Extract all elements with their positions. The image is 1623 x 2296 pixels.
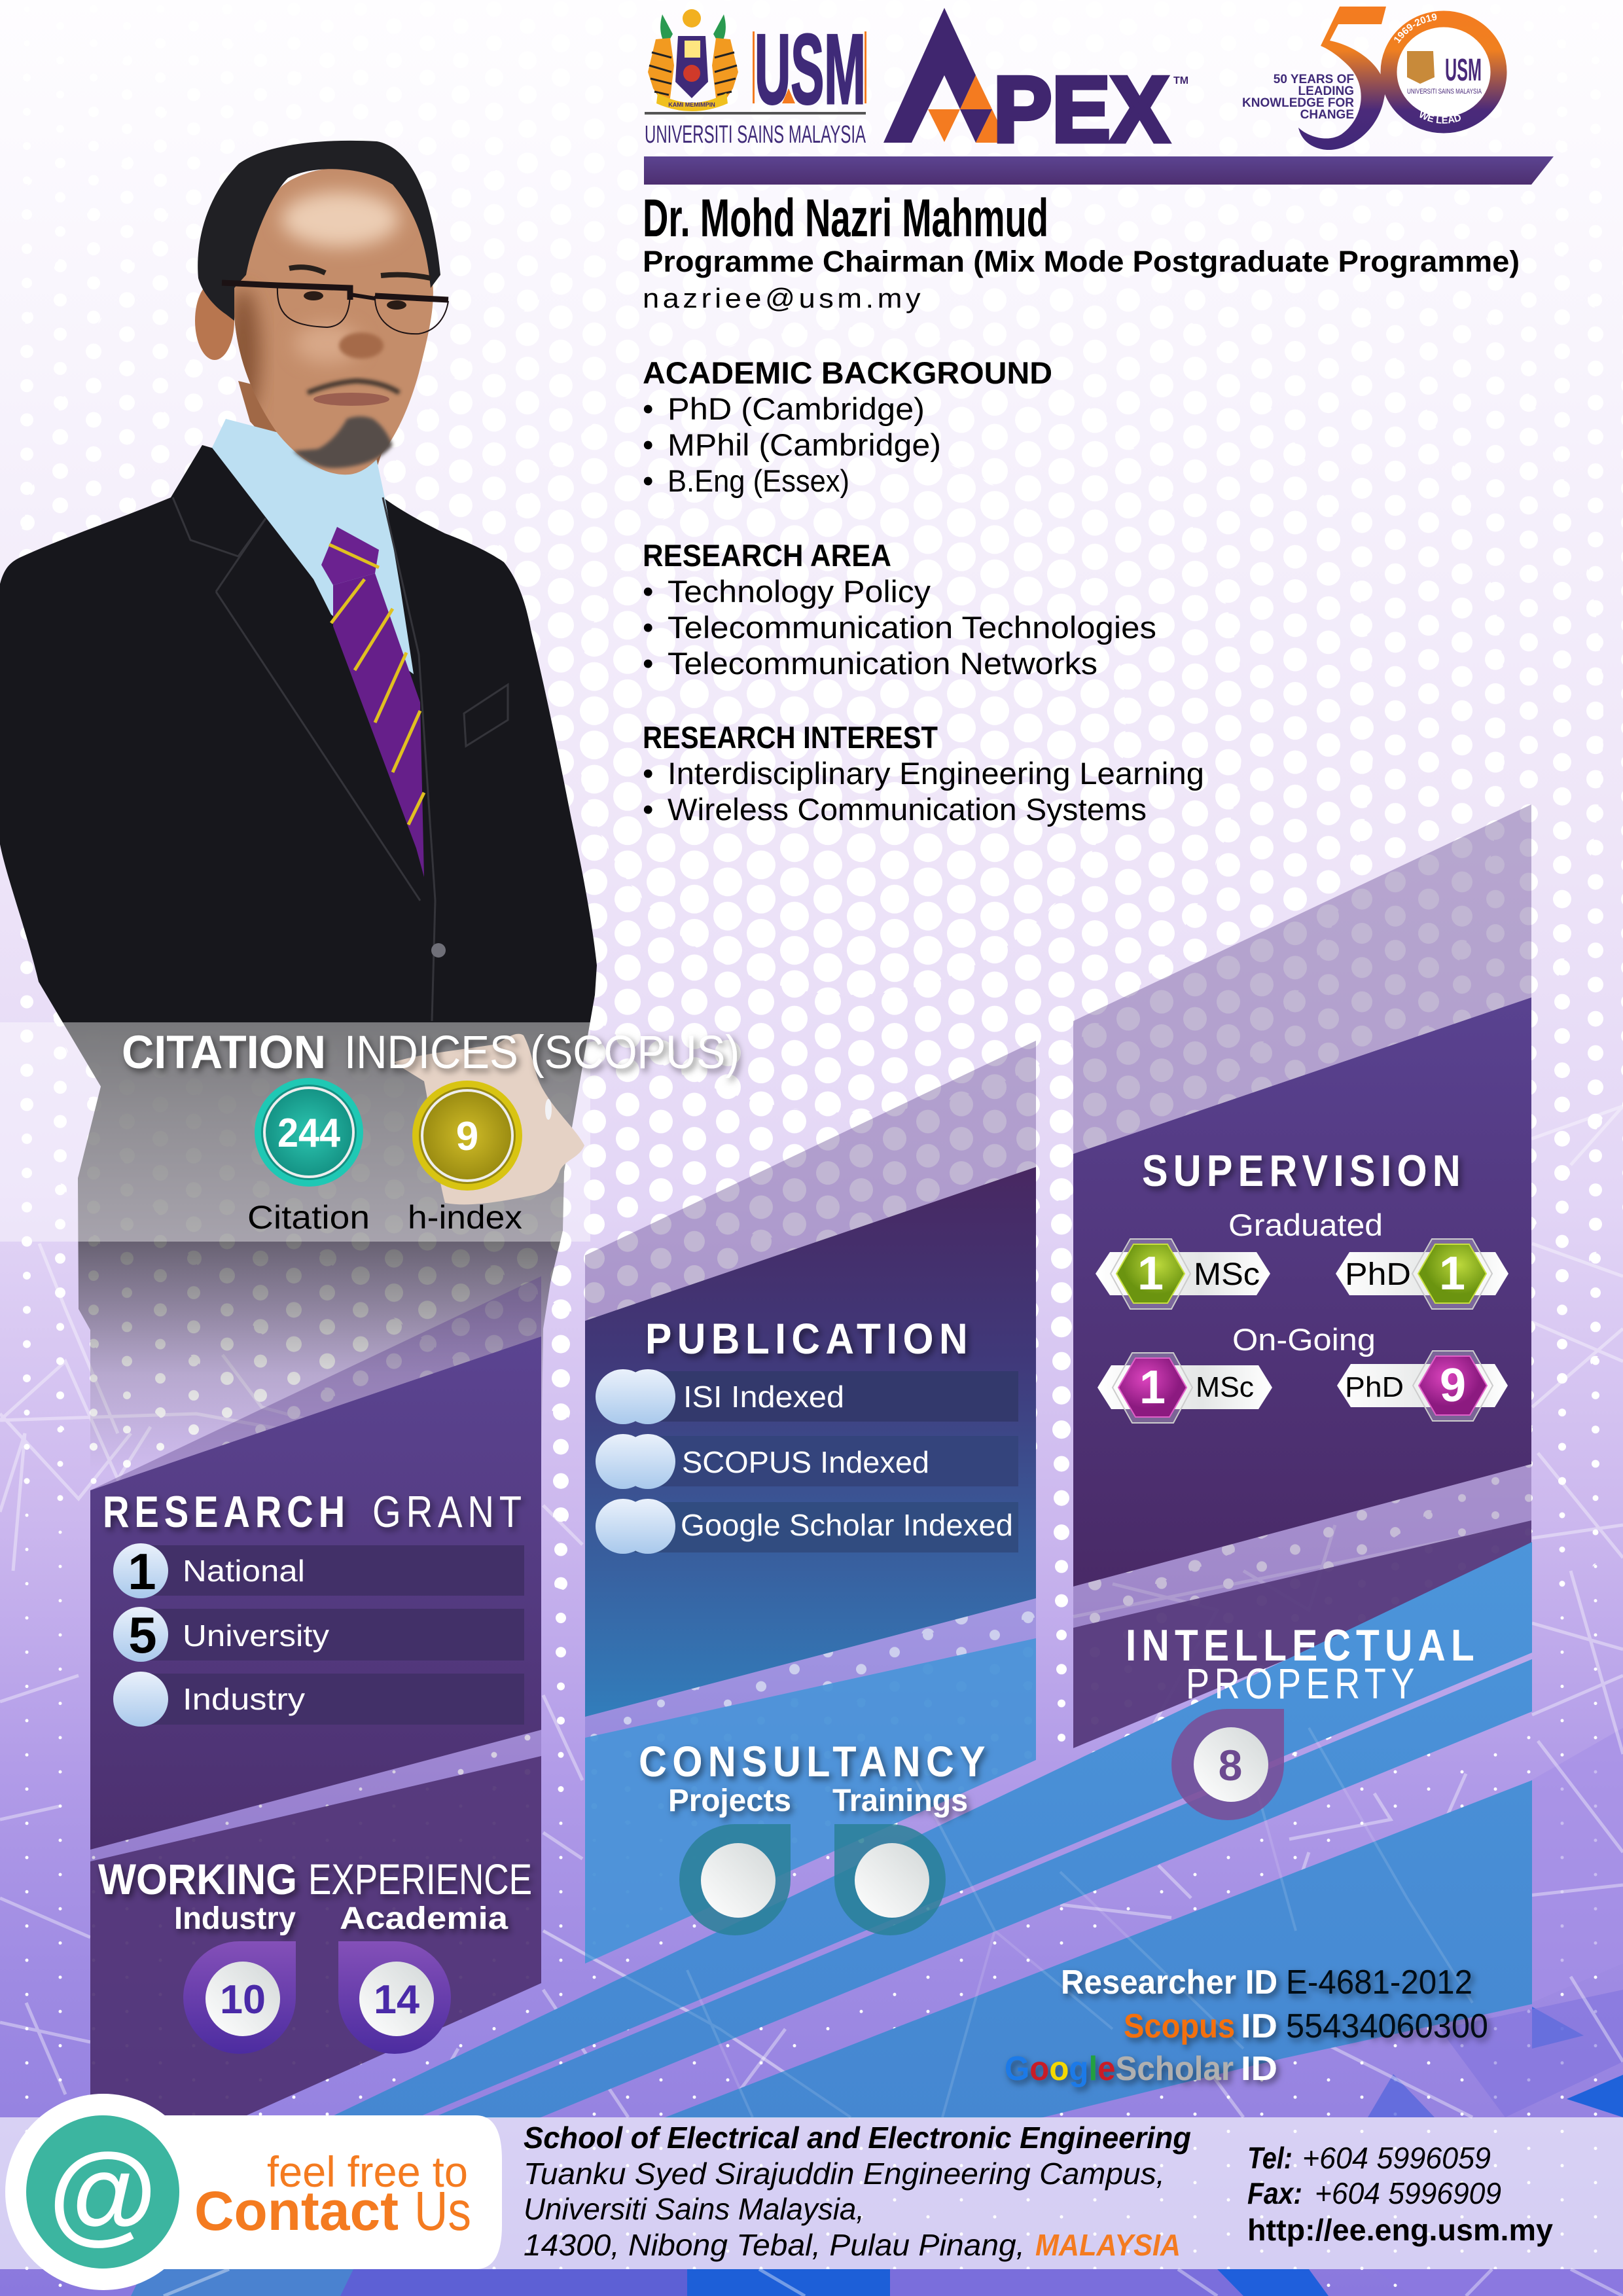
row: Google Scholar xyxy=(596,1499,1018,1554)
publication content xyxy=(596,1314,1018,1554)
row: national: 1 xyxy=(128,1543,156,1600)
row: ISI xyxy=(596,1369,1018,1424)
badge: h-index xyxy=(416,1084,519,1187)
text block: research area: • xyxy=(643,610,653,645)
working experience content xyxy=(98,1855,532,2054)
jacket and body xyxy=(0,445,597,1490)
header logo: 50 years: 1969-2019 xyxy=(1394,13,1437,43)
panel body xyxy=(585,1167,1036,1717)
header logo: 50 years: UNIVERSITI SAINS MALAYSIA xyxy=(1407,88,1482,96)
header logo: 50 years: KNOWLEDGE FOR xyxy=(1242,96,1354,110)
name: Dr. Mohd Nazri Mahmud xyxy=(643,188,1048,248)
email: nazriee@usm.my xyxy=(643,283,924,314)
text block: academic background: MPhil (Cambridge) xyxy=(668,427,941,462)
header logo: USM crest: KAMI MEMIMPIN xyxy=(668,101,715,108)
translucent slope xyxy=(1073,804,1531,1154)
chip: graduated MSc: 1 xyxy=(1137,1247,1164,1300)
text block: research interest: • xyxy=(643,792,653,827)
text block: academic background: • xyxy=(643,391,653,426)
researcher id: Researcher ID xyxy=(1061,1964,1277,2001)
scopus id: ID xyxy=(1241,2007,1277,2045)
telephone: Tel: xyxy=(1247,2141,1293,2175)
labels: Industry xyxy=(174,1901,296,1936)
text block: research interest: Interdisciplinary Engineering Learning xyxy=(668,756,1204,791)
text block: research area: RESEARCH AREA xyxy=(643,538,891,573)
chip: on-going MSc: 1 xyxy=(1139,1361,1166,1414)
translucent slope xyxy=(90,1276,541,1490)
lower panel xyxy=(90,1756,541,2118)
fax: Fax: xyxy=(1247,2176,1302,2210)
background network lines xyxy=(0,1106,1623,2296)
heading: PUBLICATION xyxy=(645,1314,973,1363)
text block: academic background: ACADEMIC BACKGROUND xyxy=(643,355,1052,390)
header logo: APEX: PEX xyxy=(993,58,1169,162)
at sign: @ xyxy=(48,2130,157,2255)
label: citation: Citation xyxy=(247,1199,370,1236)
tie xyxy=(321,527,424,877)
lower panel xyxy=(1073,1520,1531,1748)
intellectual property content xyxy=(1126,1621,1480,1820)
panel: publication and consultancy xyxy=(585,1041,1036,1964)
heading: WORKING xyxy=(98,1855,297,1903)
address block: 14300, Nibong Tebal, Pulau Pinang, xyxy=(524,2228,1025,2262)
label: on-going: On-Going xyxy=(1232,1322,1376,1357)
subheading: PROPERTY xyxy=(1186,1659,1419,1708)
badge: patents: 8 xyxy=(1219,1741,1242,1789)
badge: h-index: 9 xyxy=(456,1114,478,1159)
badge: citation count xyxy=(258,1081,360,1183)
header logo: APEX xyxy=(883,8,1188,162)
text block: academic background: • xyxy=(643,427,653,462)
researcher id xyxy=(1061,1964,1472,2001)
labels: Projects xyxy=(668,1784,791,1818)
scopus id: Scopus xyxy=(1124,2007,1235,2045)
chip: on-going PhD: 9 xyxy=(1440,1359,1466,1412)
address block: School of Electrical and Electronic Engineering xyxy=(524,2121,1191,2155)
fax: +604 5996909 xyxy=(1315,2176,1501,2210)
panel: research grant and working experience xyxy=(90,1276,541,2118)
scopus id: 55434060300 xyxy=(1286,2007,1488,2045)
row: SCOPUS xyxy=(596,1434,1018,1489)
header logo: 50 years: LEADING xyxy=(1298,84,1354,98)
hair xyxy=(198,141,440,321)
chip: graduated PhD: PhD xyxy=(1345,1257,1411,1292)
text block: research area: Technology Policy xyxy=(668,574,931,609)
chip: graduated MSc: MSc xyxy=(1194,1257,1260,1292)
chip: graduated MSc xyxy=(1096,1239,1270,1309)
row: industry xyxy=(113,1672,524,1727)
header bar xyxy=(644,156,1554,185)
chip: on-going MSc: MSc xyxy=(1196,1371,1254,1403)
badge: patents xyxy=(1171,1709,1284,1820)
label: h-index: h-index xyxy=(408,1199,522,1236)
text block: research area: • xyxy=(643,646,653,681)
panel: citation band xyxy=(0,1022,590,1242)
row: university xyxy=(113,1606,524,1664)
translucent divider xyxy=(90,1730,541,1861)
header logo: USM crest xyxy=(648,9,738,111)
contact details xyxy=(1247,2141,1553,2247)
translucent slope xyxy=(585,1041,1036,1321)
text block: research area: Telecommunication Networks xyxy=(668,646,1097,681)
row: ISI: ISI Indexed xyxy=(683,1380,844,1414)
researcher identifiers xyxy=(1005,1964,1488,2088)
text block: research interest xyxy=(643,720,1204,827)
scopus id xyxy=(1124,2007,1488,2045)
header logo: 50 years xyxy=(1242,7,1507,150)
text block: academic background: • xyxy=(643,463,653,498)
heading: INTELLECTUAL xyxy=(1126,1621,1480,1670)
chip: on-going PhD: PhD xyxy=(1345,1371,1404,1403)
white pill xyxy=(103,2115,502,2269)
citation indices section xyxy=(122,1027,740,1236)
heading: INDICES (SCOPUS) xyxy=(344,1027,740,1079)
row: Google Scholar: Google Scholar Indexed xyxy=(681,1508,1013,1542)
contact us: Contact xyxy=(194,2180,399,2242)
neck xyxy=(238,381,393,521)
header logo: USM wordmark: USM xyxy=(755,14,866,125)
contact callout xyxy=(5,2094,502,2290)
label: graduated: Graduated xyxy=(1228,1208,1383,1242)
jacket lapels and pocket xyxy=(173,497,508,1021)
text block: research area xyxy=(643,538,1156,681)
chip: on-going PhD xyxy=(1337,1351,1508,1421)
blue diagonal stripes xyxy=(329,1542,1532,2118)
header logo: 50 years: WE LEAD xyxy=(1419,111,1461,124)
heading: CONSULTANCY xyxy=(639,1737,991,1785)
face xyxy=(234,167,433,475)
text block: academic background: B.Eng (Essex) xyxy=(668,463,849,498)
footer band xyxy=(0,2117,1623,2269)
chip: graduated PhD: 1 xyxy=(1439,1247,1465,1300)
panel: supervision and intellectual property xyxy=(1073,804,1531,1748)
text block: research area: • xyxy=(643,574,653,609)
header logo: 50 years: CHANGE xyxy=(1300,108,1354,122)
text block: academic background xyxy=(643,355,1052,498)
teal circle xyxy=(26,2115,179,2269)
text block: research interest: RESEARCH INTEREST xyxy=(643,720,938,755)
address block: Universiti Sains Malaysia, xyxy=(524,2192,865,2226)
consultancy content xyxy=(639,1737,991,1935)
eyes xyxy=(304,291,406,310)
google scholar id: GoogleScholar xyxy=(1005,2050,1234,2088)
shirt collar xyxy=(212,419,414,674)
heading xyxy=(122,1027,740,1079)
row: national: National xyxy=(183,1554,305,1588)
background low-poly triangles xyxy=(131,1728,1623,2296)
row: national xyxy=(113,1543,524,1600)
consultancy panel xyxy=(585,1638,1036,1964)
labels: Academia xyxy=(340,1901,508,1936)
header logo: 50 years: 50 YEARS OF xyxy=(1274,73,1354,86)
chip: graduated PhD xyxy=(1336,1239,1508,1309)
panel body xyxy=(1073,997,1531,1587)
eyebrows xyxy=(289,267,431,278)
address block: MALAYSIA xyxy=(1035,2228,1181,2262)
faint network lines over blue xyxy=(543,1728,1472,2117)
panel body xyxy=(90,1336,541,1850)
header logo: USM wordmark xyxy=(645,14,866,149)
translucent divider xyxy=(1073,1464,1531,1628)
heading: CITATION xyxy=(122,1027,326,1079)
heading: GRANT xyxy=(372,1487,527,1537)
google scholar id: ID xyxy=(1241,2050,1277,2088)
watch sparkle xyxy=(545,1099,552,1120)
row: university: University xyxy=(183,1619,329,1653)
heading xyxy=(98,1855,532,1903)
text block: academic background: PhD (Cambridge) xyxy=(668,391,925,426)
header logo: 50 years: USM xyxy=(1445,53,1482,88)
goatee xyxy=(293,416,393,468)
telephone: +604 5996059 xyxy=(1302,2141,1491,2175)
face shading xyxy=(226,192,399,419)
row: industry: Industry xyxy=(183,1682,305,1716)
heading: EXPERIENCE xyxy=(308,1855,532,1903)
heading: SUPERVISION xyxy=(1142,1146,1466,1196)
labels xyxy=(668,1784,968,1818)
badge: trainings xyxy=(834,1824,946,1935)
moustache xyxy=(308,381,399,393)
address block: Tuanku Syed Sirajuddin Engineering Campus, xyxy=(524,2157,1165,2191)
badge: academia years: 14 xyxy=(374,1977,420,2022)
feel free to: feel free to xyxy=(267,2147,468,2196)
research grant content xyxy=(103,1487,527,1727)
white circle xyxy=(5,2094,202,2290)
researcher id: E-4681-2012 xyxy=(1286,1964,1472,2001)
labels xyxy=(174,1901,508,1936)
chip: on-going MSc xyxy=(1097,1353,1272,1423)
panel: researcher photo illustration xyxy=(0,141,597,1490)
header logo: USM wordmark: UNIVERSITI SAINS MALAYSIA xyxy=(645,121,866,149)
nose xyxy=(339,332,383,359)
header logo: APEX: TM xyxy=(1173,75,1188,86)
badge: academia years xyxy=(338,1941,451,2054)
hand xyxy=(393,1034,584,1204)
lips xyxy=(313,393,389,406)
website: http://ee.eng.usm.my xyxy=(1247,2213,1553,2247)
text block: research area: Telecommunication Technologies xyxy=(668,610,1156,645)
badge: industry years: 10 xyxy=(220,1977,266,2022)
badge: industry years xyxy=(183,1941,296,2054)
heading: RESEARCH xyxy=(103,1487,350,1537)
ear xyxy=(195,281,234,360)
row: university: 5 xyxy=(128,1606,157,1664)
text block: research interest: Wireless Communication Systems xyxy=(668,792,1147,827)
row: SCOPUS: SCOPUS Indexed xyxy=(682,1445,929,1479)
position: Programme Chairman (Mix Mode Postgraduate Programme) xyxy=(643,245,1520,278)
badge: projects xyxy=(679,1824,791,1935)
glasses xyxy=(222,283,448,334)
supervision content xyxy=(1096,1146,1508,1423)
jacket button xyxy=(431,943,446,958)
text block: research interest: • xyxy=(643,756,653,791)
badge: citation count: 244 xyxy=(277,1111,340,1156)
contact us: Us xyxy=(414,2180,471,2242)
labels: Trainings xyxy=(832,1784,968,1818)
address block xyxy=(524,2121,1191,2262)
translucent divider xyxy=(585,1598,1036,1738)
